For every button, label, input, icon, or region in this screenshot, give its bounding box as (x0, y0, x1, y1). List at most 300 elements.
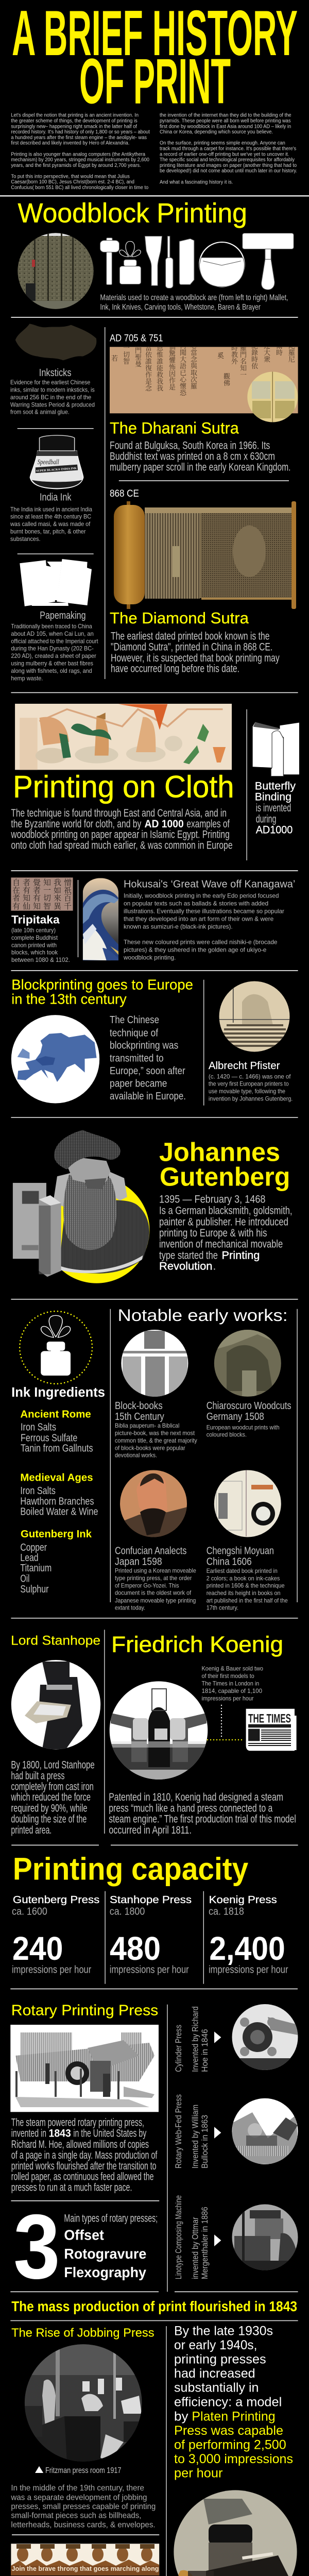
panel: Tripitaka (11, 877, 74, 963)
panel: notable early works: Notable early works: (117, 1306, 288, 1325)
work: block-books: of block-books were popular (115, 1444, 185, 1451)
panel: blockprinting goes to Europe: Blockprinting goes to Europe (11, 977, 193, 993)
photo: inkstick (15, 324, 96, 360)
panel: india ink: was called masi, & was made of (10, 520, 91, 528)
list: Medieval Ages: Hawthorn Branches (20, 1496, 94, 1507)
panel: papermaking: along with fishnets, old rags, and (11, 667, 92, 674)
work: Confucian Analects: extant today. (115, 1604, 145, 1612)
panel: rise of jobbing press: In the middle of the 19th century, there (11, 2484, 144, 2493)
panel: butterfly binding: Butterfly (255, 780, 296, 792)
heading: Woodblock Printing: Woodblock Printing (18, 198, 247, 229)
work: Chengshi Moyuan: 17th century. (207, 1604, 238, 1612)
icon: ink bottle in dotted circle (20, 1311, 92, 1384)
item: rotary web-fed press: Bullock in 1863 (200, 2115, 210, 2168)
panel: rise of jobbing press: letterheads, business cards, & envelopes. (11, 2521, 156, 2530)
panel: Albrecht Pfister: use movable type, following the (209, 1088, 285, 1095)
panel: Albrecht Pfister: Albrecht Pfister (209, 1060, 280, 1072)
caption: woodblock materials (100, 293, 288, 312)
work: Confucian Analects: Japan 1598 (115, 1556, 162, 1567)
panel: Albrecht Pfister: (c. 1420 — c. 1466) was one of (209, 1073, 291, 1080)
arrow (214, 2127, 221, 2139)
intro left column (11, 113, 150, 191)
panel: platen printing press: or early 1940s, (174, 2338, 257, 2352)
panel: Diamond Sutra: The Diamond Sutra (110, 609, 249, 627)
work: Confucian Analects: Printed using a Korean moveable (115, 1567, 196, 1574)
note: The Times sale: Koenig & Bauer sold two (202, 1665, 263, 1672)
panel: papermaking: about AD 105, when Cai Lun, an (11, 630, 94, 637)
panel: platen printing press: By the late 1930s (174, 2324, 273, 2338)
engraving: Hoe rotary press (10, 2025, 159, 2112)
photo: Dharani Sutra scroll: 當依誰復作是念 (145, 344, 152, 392)
item: cylinder press: Cylinder Press (174, 2025, 183, 2072)
panel: Hokusai text: Initially, woodblock printing in the early Edo period focused (124, 892, 279, 900)
image: Great Wave print (83, 878, 118, 960)
work: Confucian Analects: type printing press, at the order (115, 1574, 192, 1582)
panel: rotary printing press (10, 2003, 159, 2194)
icon: ink knife (145, 236, 162, 285)
illustration: Gutenberg portrait (13, 1130, 150, 1283)
work: Confucian Analects: document is the oldest work of (115, 1589, 192, 1597)
face (68, 1158, 110, 1185)
panel: blockprinting goes to Europe: available in Europe. (110, 1091, 186, 1102)
panel: Tripitaka: Tripitaka (11, 913, 60, 926)
icon: carving tool (165, 236, 173, 288)
list: Gutenberg Ink: Lead (20, 1552, 39, 1564)
panel: inksticks: inks, similar to modern inksticks, is (10, 386, 95, 394)
note: The Times sale: of their first models to (202, 1672, 254, 1680)
panel: Hokusai text: These new coloured prints were called nishiki-e (brocade (124, 938, 278, 945)
list: Ancient Rome: Ancient Rome (20, 1409, 91, 1420)
panel: papermaking: during the Han Dynasty (202 BC- (11, 645, 94, 652)
panel: ink ingredients (11, 1311, 105, 1595)
panel: Johannes Gutenberg: 1395 — February 3, 1468 (159, 1193, 266, 1205)
panel: printing on cloth: AD 1000 (144, 818, 184, 830)
panel: platen printing press: Platen Printing (192, 2409, 276, 2424)
work: block-books: picture-book, was the next most (115, 1430, 195, 1437)
stat: Stanhope Press: 480 (110, 1930, 161, 1967)
engraving: linotype machine (232, 2204, 298, 2271)
image: WWI poster: Join the brave throng that goes marching along (11, 2565, 159, 2572)
panel: platen printing press: substantially in (174, 2381, 259, 2395)
panel: Johannes Gutenberg: . (213, 1260, 216, 1272)
photo: cylinder press (232, 2004, 298, 2071)
panel: blockprinting goes to Europe: technique of (110, 1028, 158, 1039)
stat: Gutenberg Press: ca. 1600 (12, 1906, 47, 1918)
panel: Albrecht Pfister: invention by Johannes Gutenberg. (209, 1095, 293, 1102)
intro left column: Printing is also younger than analog computers (the Antikythera (11, 151, 145, 157)
photo: Dharani Sutra scroll: 記錄時依 (251, 342, 258, 370)
panel: Tripitaka: blocks, which took (11, 949, 58, 956)
item: cylinder press (174, 2004, 298, 2072)
panel: blockprinting goes to Europe: Europe,” soon after (110, 1065, 185, 1077)
list: Medieval Ages: Boiled Water & Wine (20, 1506, 98, 1518)
intro left column: years, and the first pyramids of Egypt by around 2,700 years. (11, 163, 141, 168)
panel: rise of jobbing press: presses, small presses capable of printing (11, 2502, 156, 2511)
panel: rotary printing press: in the United States by (73, 2128, 147, 2140)
work: Chengshi Moyuan: Chengshi Moyuan (207, 1546, 274, 1557)
image: Tripitaka printed page: 在有者一如祇 (12, 886, 74, 895)
list: Gutenberg Ink: Copper (20, 1542, 47, 1553)
panel: three main rotary press types: Offset (64, 2227, 104, 2243)
panel: Lord Stanhope: Lord Stanhope (11, 1633, 100, 1648)
item: linotype composing machine: invented by Ottmar (191, 2217, 200, 2279)
work: Chengshi Moyuan: printed in 1606 & the technique (207, 1582, 285, 1589)
intro left column: Let's dispel the notion that printing is an ancient invention. In (11, 113, 139, 118)
panel: inksticks: Evidence for the earliest Chinese (10, 379, 91, 386)
panel: inksticks: Inksticks (39, 367, 71, 379)
panel: Dharani Sutra (110, 333, 298, 473)
intro text block (11, 113, 297, 191)
panel: Lord Stanhope: By 1800, Lord Stanhope (11, 1759, 95, 1771)
front block (39, 1195, 61, 1277)
intro right column: a record of earlier one-off printing but we've yet to uncover it. (160, 151, 289, 157)
engraving: web-fed press (232, 2098, 298, 2164)
map: Europe circle (11, 1015, 99, 1104)
panel: blockprinting goes to Europe: transmitted to (110, 1053, 164, 1064)
photo: Dharani Sutra scroll: 若 (111, 354, 118, 362)
list: Gutenberg Ink (20, 1529, 92, 1595)
panel: three main rotary press types: 3 (13, 2195, 60, 2298)
intro right column: first done by woodblock in East Asia around 100 AD – likely in (160, 124, 291, 129)
work: Confucian Analects: of Emperor Go-Yozei. This (115, 1582, 179, 1589)
panel: Johannes Gutenberg: printing to Europe & with his (159, 1227, 267, 1239)
intro right column: China or Korea, depending which source you believe. (160, 129, 273, 135)
panel: notable early works (115, 1306, 291, 1612)
list: Gutenberg Ink: Titanium (20, 1563, 52, 1574)
panel: Johannes Gutenberg (13, 1130, 293, 1283)
item: linotype composing machine: Mergenthaler in 1886 (200, 2207, 210, 2279)
panel: blockprinting goes to Europe: in the 13th century (11, 991, 127, 1007)
panel: Hokusai text (123, 879, 295, 961)
photo: Dharani Sutra scroll: 時教外 (231, 344, 238, 365)
panel: Hokusai text: illustrations. Eventually these illustrations became so popular (124, 908, 284, 915)
work: Chengshi Moyuan: 2 colors; a book on ink-cakes (207, 1574, 280, 1582)
image: medieval cloth painting (15, 704, 232, 770)
panel: Johannes Gutenberg: type started the (159, 1249, 218, 1261)
panel: three main rotary press types: Flexography (64, 2264, 146, 2280)
image: Pfister woodcut (219, 981, 290, 1052)
photo: Fritzman press room (24, 2344, 144, 2463)
work: block-books: Block-books (115, 1400, 163, 1412)
stat: Stanhope Press: Stanhope Press (110, 1894, 192, 1906)
work: block-books: 15th Century (115, 1411, 164, 1422)
panel: Johannes Gutenberg: Printing (221, 1249, 260, 1261)
panel: printing on cloth: examples of (186, 818, 230, 830)
photo: woodblock racks (18, 233, 94, 309)
photo: platen press (174, 2490, 297, 2576)
photo: Stanhope press (11, 1660, 100, 1749)
stat: Gutenberg Press (12, 1894, 99, 1975)
work: chiaroscuro woodcuts: Germany 1508 (207, 1411, 264, 1422)
panel: rotary printing press: rolled paper, as continuous feed allowed the (11, 2171, 154, 2183)
panel: platen printing press: had increased (174, 2366, 255, 2381)
intro left column: recorded history. It's had history of only 1,800 or so years – about (11, 129, 150, 135)
stat: Gutenberg Press: Gutenberg Press (13, 1894, 99, 1906)
panel: rotary printing press: printed works flourished after the transition to (11, 2160, 157, 2172)
caption: Fritzman press room: Fritzman press room 1917 (45, 2466, 121, 2475)
panel: ink ingredients: Ink Ingredients (11, 1385, 105, 1400)
panel: printing on cloth (11, 704, 234, 852)
panel: rise of jobbing press (10, 2326, 156, 2530)
beard (63, 1175, 116, 1250)
stat: Koenig Press: Koenig Press (209, 1894, 277, 1906)
intro right column: And what a fascinating history it is. (160, 179, 233, 185)
panel: india ink: since at least the 4th century BC (10, 513, 91, 520)
intro right column: On the surface, printing seems simple enough. Anyone can (160, 141, 285, 146)
list: Gutenberg Ink: Oil (20, 1573, 29, 1585)
panel: Lord Stanhope: doubling the size of the (11, 1813, 87, 1825)
panel: india ink: The India ink used in ancient India (10, 505, 92, 513)
stat: Gutenberg Press: 240 (12, 1930, 63, 1967)
work: chiaroscuro woodcuts: coloured blocks. (207, 1431, 247, 1438)
panel: india ink: substances. (10, 535, 40, 543)
photo: india ink bottle: SUPER BLACK® INDIA INK (36, 466, 77, 473)
panel: Tripitaka: (late 10th century) (11, 926, 56, 934)
panel: butterfly binding: Binding (255, 791, 291, 803)
image: Tripitaka printed page: 有仙知智異千 (12, 902, 74, 911)
icon: ink bottle (119, 241, 141, 284)
image: Tripitaka printed page: 自者覺知我憎 (12, 878, 74, 887)
panel: butterfly binding: during (256, 814, 276, 825)
stat: Stanhope Press: impressions per hour (110, 1964, 189, 1975)
photo: Dharani Sutra scroll: 達大衆 (264, 342, 270, 363)
panel: blockprinting goes to Europe: blockprinting was (110, 1040, 178, 1052)
panel: Hokusai text: Hokusai's ‘Great Wave off Kanagawa’ (124, 879, 295, 890)
panel: platen printing press: efficiency: a model (174, 2395, 282, 2410)
panel: Friedrich Koenig: Friedrich Koenig (111, 1633, 283, 1657)
intro left column: first described and likely invented by Hero of Alexandria. (11, 141, 129, 146)
work: chiaroscuro woodcuts (207, 1329, 291, 1438)
title (12, 0, 298, 117)
icon: brayer (243, 233, 294, 290)
intro left column: mechanism) by 200 years, stringed musical instruments by 2,600 (11, 157, 149, 163)
item: rotary web-fed press: Rotary Web-Fed Press (174, 2094, 183, 2168)
work: Chengshi Moyuan: reached its height in books on (207, 1589, 281, 1597)
panel: platen printing press (174, 2324, 297, 2576)
panel: rotary printing press: of a page in a single day. Mass production of (11, 2149, 158, 2161)
work: chiaroscuro woodcuts: Chiaroscuro Woodcuts (207, 1400, 291, 1412)
panel: papermaking (11, 559, 98, 682)
photo: Koenig press (109, 1681, 208, 1780)
panel: india ink: burnt bones, tar, pitch, & other (10, 528, 86, 535)
panel: Hokusai text: pictures) & they ushered in the golden age of ukiyo-e (124, 946, 267, 953)
panel: Lord Stanhope: completely from cast iron (11, 1781, 94, 1792)
photo: Dharani Sutra scroll: 門聖曼 (135, 347, 142, 368)
image: WWI poster (11, 2544, 159, 2575)
panel: india ink (10, 435, 92, 543)
panel: papermaking: Traditionally been traced to China (11, 622, 92, 630)
panel: papermaking: official attached to the Imperial court (11, 637, 98, 645)
stat: Koenig Press: 2,400 (209, 1930, 285, 1967)
work: Chengshi Moyuan: art published in the first half of the (207, 1597, 288, 1604)
panel: rise of jobbing press: small-format pieces such as billheads, (11, 2512, 141, 2520)
icon: baren (199, 242, 245, 287)
panel: Dharani Sutra: AD 705 & 751 (110, 333, 163, 344)
panel: butterfly binding (253, 722, 299, 836)
intro right column: track mud through a carpet for instance. It's possible that there's (160, 146, 296, 151)
panel: papermaking: Papemaking (40, 610, 85, 621)
panel: Friedrich Koenig (109, 1633, 297, 1836)
panel: platen printing press: printing presses (174, 2352, 266, 2367)
panel: Friedrich Koenig: occurred in April 1811. (109, 1824, 192, 1836)
heading: Printing capacity: Printing capacity (13, 1851, 248, 1886)
panel: blockprinting goes to Europe: The Chinese (110, 1014, 159, 1026)
intro right column: be developed!) did not come about until much later in our history. (160, 168, 297, 174)
panel: Hokusai text: that they developed into an art form of their own & were (124, 915, 274, 922)
list: Medieval Ages: Medieval Ages (20, 1472, 93, 1483)
panel: rotary printing press: invented in (11, 2128, 46, 2140)
photo: Dharani Sutra scroll: 個驚懼怖因作是 (169, 343, 176, 391)
photo: Dharani Sutra scroll: 心當念與取次羅 (191, 342, 198, 390)
list: Medieval Ages (20, 1472, 98, 1518)
panel: three main rotary press types (13, 2195, 158, 2298)
panel: Albrecht Pfister: the very first European printers to (209, 1080, 289, 1088)
photo: india ink bottle: Speedball (38, 459, 59, 466)
photo: Dharani Sutra scroll: 陀羅尼 (288, 342, 295, 363)
icon: paper sheets (20, 559, 92, 606)
arrow (214, 2234, 221, 2246)
item: rotary web-fed press: Invented by William (191, 2105, 200, 2168)
icon: whetstone (179, 239, 194, 284)
panel: During World War I (11, 2544, 159, 2576)
list: Ancient Rome (20, 1409, 93, 1454)
work: Chengshi Moyuan: Earliest dated book printed in (207, 1567, 278, 1574)
stat: Koenig Press: ca. 1818 (209, 1906, 244, 1918)
panel: blockprinting goes to Europe (11, 977, 193, 1104)
panel: papermaking: 220 AD), created a sheet of paper (11, 652, 96, 659)
panel: printing on cloth: the Byzantine world for cloth, and by (11, 818, 142, 830)
panel: Hokusai text: on popular texts such as ballads & stories with added (124, 900, 268, 907)
panel: Diamond Sutra: have occurred long before this date. (111, 663, 239, 674)
panel: printing on cloth: The technique is found through East and Central Asia, and in (11, 807, 227, 819)
list: Ancient Rome: Tanin from Gallnuts (21, 1443, 93, 1454)
stat: Stanhope Press (110, 1894, 192, 1975)
panel: Hokusai text: woodblock printing. (123, 954, 176, 961)
hat (54, 1130, 121, 1170)
panel: platen printing press: Press was capable (174, 2424, 283, 2438)
inset: printed pages circle (247, 371, 298, 422)
panel: rotary printing press: Rotary Printing Press (11, 2003, 158, 2019)
arrow (214, 2031, 221, 2043)
intro left column: the greater scheme of things, the development of printing is (11, 118, 138, 124)
intro right column (160, 113, 297, 185)
panel: Diamond Sutra (110, 488, 296, 674)
intro left column: Confucius( born 551 BC) all lived chronologically closer in time to (11, 185, 149, 191)
panel: rotary printing press: presses to run at a much faster pace. (11, 2182, 132, 2194)
intro right column: The specific social and technological prerequisites for affordably (160, 157, 295, 163)
work: Confucian Analects (115, 1469, 196, 1612)
panel: Lord Stanhope: had built a press (11, 1770, 64, 1782)
intro left column: Caesar(born 100 BC), Jesus Christ(born est. 2-4 BC), and (11, 179, 134, 185)
stat: Koenig Press: impressions per hour (209, 1964, 288, 1975)
panel: platen printing press: to 3,000 impressions (174, 2452, 293, 2466)
stat: Gutenberg Press: impressions per hour (12, 1964, 91, 1975)
photo: india ink bottle (30, 435, 83, 489)
panel: Tripitaka: between 1080 & 1102. (11, 956, 70, 963)
connector: dotted lines (208, 1705, 245, 1740)
panel: Tripitaka: canon printed with (11, 941, 57, 948)
list: Medieval Ages: Iron Salts (20, 1485, 56, 1497)
panel: rotary printing press: The steam powered rotary printing press, (11, 2117, 144, 2129)
image: Tripitaka printed page (11, 877, 74, 911)
icon: butterfly-bound book (253, 722, 299, 776)
work: Confucian Analects: Confucian Analects (115, 1546, 186, 1557)
type blocks (13, 1183, 46, 1259)
panel: rise of jobbing press: The Rise of Jobbing Press (11, 2326, 154, 2340)
panel: Dharani Sutra: The Dharani Sutra (110, 419, 239, 437)
item: cylinder press: Hoe in 1846 (200, 2029, 210, 2072)
photo: Dharani Sutra scroll: 爾時 (276, 342, 283, 357)
intro left column: To put this into perspective, that would mean that Julius (11, 174, 130, 179)
panel: Johannes Gutenberg: Gutenberg (160, 1162, 290, 1192)
icon set: woodblock tools (100, 233, 294, 290)
intro right column: the invention of the internet than they did to the building of the (160, 113, 291, 118)
panel: printing on cloth: woodblock printing on paper appear in Islamic Egypt. Printing (11, 829, 230, 841)
work: chiaroscuro woodcuts: European woodcut prints with (207, 1423, 280, 1431)
panel: rotary printing press: Richard M. Hoe, allowed millions of copies (11, 2139, 149, 2150)
panel: rotary printing press: 1843 (48, 2128, 71, 2140)
panel: rise of jobbing press: was a separate development of jobbing (10, 2493, 147, 2502)
photo: Dharani Sutra scroll (110, 342, 298, 422)
intro left column: surprisingly new– happening right smack in the latter half of (11, 124, 137, 129)
work: block-books: common title, & the great majority (115, 1437, 197, 1444)
panel: blockprinting goes to Europe: paper became (110, 1078, 167, 1089)
panel: printing on cloth: onto cloth had spread much earlier, & was common in Europe (11, 840, 233, 852)
panel: inksticks: around 256 BC in the end of the (10, 394, 91, 401)
work: block-books: Biblia pauperum- a Biblical (115, 1422, 179, 1429)
panel: papermaking: using mulberry & other bast fibres (11, 660, 93, 667)
stat: Stanhope Press: ca. 1800 (110, 1906, 145, 1918)
work: Chengshi Moyuan: China 1606 (207, 1556, 252, 1567)
intro right column: pyramids. These people were all born well before printing was (160, 118, 290, 124)
panel: Albrecht Pfister (209, 981, 293, 1102)
note: The Times sale: The Times in London in (202, 1680, 259, 1687)
work: Chengshi Moyuan (207, 1469, 288, 1612)
panel: three main rotary press types: Main types of rotary presses; (64, 2212, 158, 2224)
panel: inksticks: from soot & animal glue. (10, 409, 70, 416)
panel: Johannes Gutenberg: Johannes (159, 1137, 280, 1166)
panel: butterfly binding: AD1000 (256, 824, 293, 836)
panel: three main rotary press types: Rotogravure (64, 2246, 146, 2262)
panel: platen printing press: per hour (174, 2466, 222, 2480)
icon: mallet (100, 238, 119, 285)
work: block-books: devotional works. (115, 1452, 157, 1459)
intro right column: printing literature and images on paper (another thing that had to (160, 163, 297, 168)
panel: Diamond Sutra: 868 CE (110, 488, 139, 499)
caption: woodblock materials: Ink, Ink Knives, Carving tools, Whetstone, Baren & Brayer (100, 303, 261, 312)
item: linotype composing machine (174, 2195, 298, 2279)
photo: Dharani Sutra scroll: 恩惟誰能救我我 (157, 344, 164, 392)
body (59, 1200, 149, 1274)
panel: butterfly binding: is invented (256, 802, 291, 814)
item: rotary web-fed press (174, 2094, 298, 2168)
panel: india ink: India Ink (40, 492, 72, 503)
work: Confucian Analects: Japanese moveable type printing (115, 1597, 196, 1604)
list: Ancient Rome: Iron Salts (21, 1422, 56, 1433)
panel: Johannes Gutenberg: Revolution (159, 1260, 212, 1272)
panel: Tripitaka: complete Buddhist (11, 934, 58, 941)
note: The Times sale: 1814, capable of 1,100 (202, 1687, 262, 1694)
panel: platen printing press: by (174, 2409, 188, 2424)
ruff (53, 1171, 127, 1209)
photo: Dharani Sutra scroll: 何聞大語已心懷恐 (180, 342, 187, 397)
list: Gutenberg Ink: Gutenberg Ink (21, 1529, 92, 1540)
list: Gutenberg Ink: Sulphur (20, 1584, 49, 1595)
stat: Koenig Press (209, 1894, 288, 1975)
photo: Dharani Sutra scroll: 羅門名知一 (240, 344, 247, 379)
item: cylinder press: Invented by Richard (191, 2006, 200, 2072)
work: block-books (115, 1329, 197, 1459)
